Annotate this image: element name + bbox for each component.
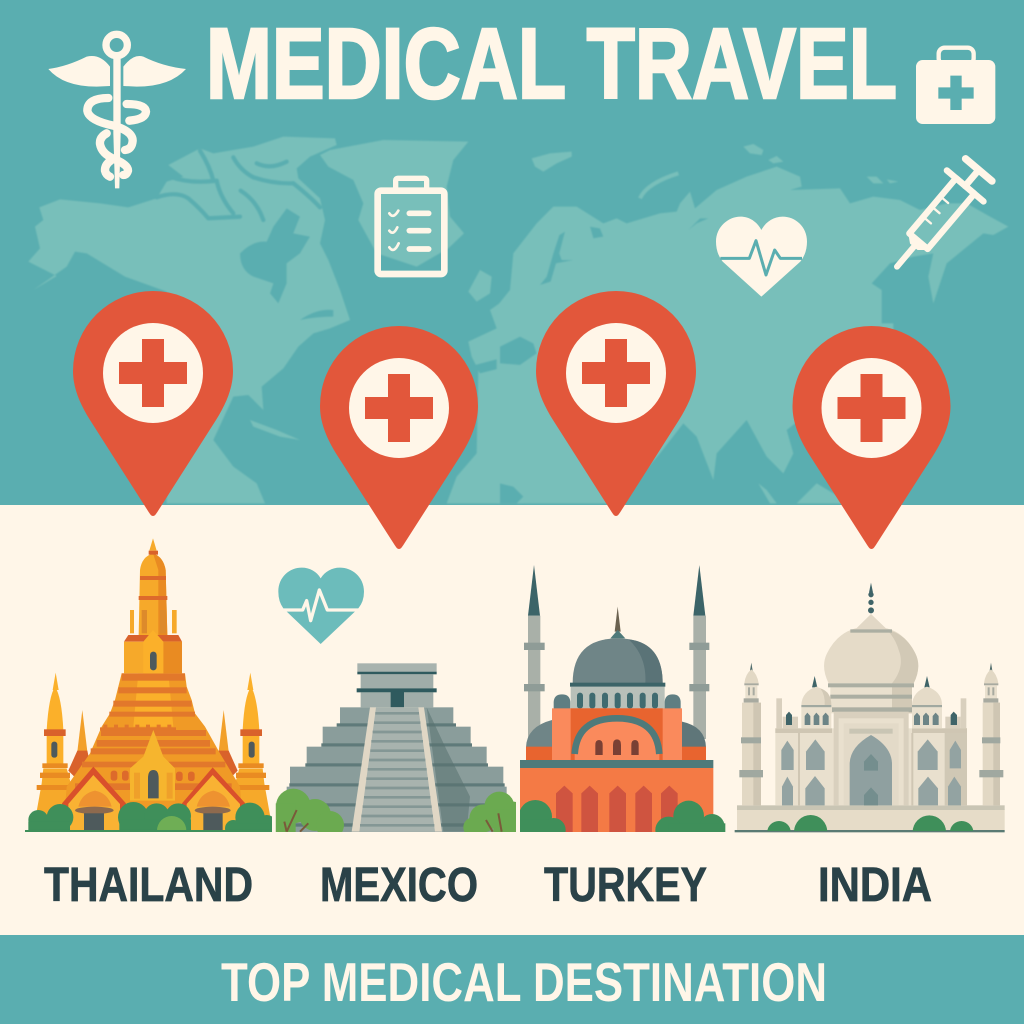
icon: heart with pulse (716, 217, 807, 297)
footer band (0, 935, 1024, 1024)
teal map background panel (0, 0, 1024, 505)
icon: caduceus (48, 34, 186, 188)
cream destinations panel (0, 505, 1024, 935)
landmark: Thai temple (25, 538, 277, 845)
icon: teal heart with pulse (278, 568, 364, 644)
map pin: India (792, 326, 950, 549)
map pin: Thailand (73, 291, 233, 516)
icon: first aid kit (916, 48, 995, 124)
label: Thailand: THAILAND (44, 859, 253, 912)
world map (28, 137, 1008, 503)
map pin: Mexico (320, 326, 478, 549)
map pin: Turkey (536, 291, 696, 516)
label: India: INDIA (818, 859, 932, 912)
landmark: Turkish mosque (519, 565, 725, 843)
footer caption: TOP MEDICAL DESTINATION (221, 951, 827, 1013)
landmark: Mexican pyramid (276, 663, 523, 839)
icon: syringe (879, 154, 997, 282)
icon: clipboard checklist (378, 178, 444, 274)
landmark: Taj Mahal (735, 583, 1005, 849)
label: Turkey: TURKEY (544, 859, 707, 912)
label: Mexico: MEXICO (320, 859, 478, 912)
